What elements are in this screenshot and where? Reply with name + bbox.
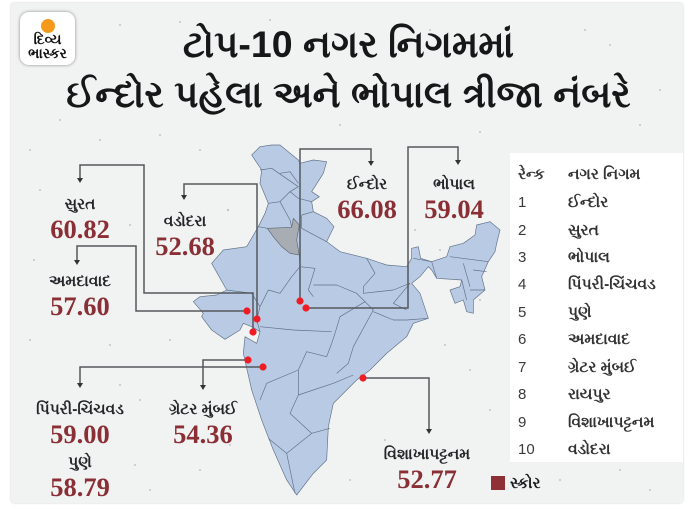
label: Vadodara: 52.68	[155, 231, 215, 261]
row 5	[518, 302, 592, 321]
row 2	[518, 222, 599, 239]
row 10: વડોદરા	[568, 441, 611, 458]
connector: Bhopal	[306, 147, 461, 308]
row 4: 4	[518, 276, 526, 293]
row 2: સુરત	[568, 222, 599, 239]
row 6	[518, 331, 630, 348]
connector: Pimpri-Chinchwad	[77, 367, 263, 388]
logo: Divya Bhaskar: ભાસ્કર	[28, 45, 67, 61]
label: Surat: 60.82	[50, 214, 110, 244]
connector: Visakhapatnam	[363, 378, 432, 434]
label: Greater Mumbai	[169, 400, 238, 449]
label: Pune: 58.79	[50, 472, 110, 502]
row 6: 6	[518, 331, 526, 348]
table header: નગર નિગમ	[568, 166, 640, 183]
legend: score: સ્કોર	[510, 475, 541, 492]
row 8	[518, 386, 611, 403]
Haryana highlight	[267, 218, 299, 255]
label: Surat: સુરત	[65, 196, 95, 213]
label: Pimpri-Chinchwad: પિંપરી-ચિંચવડ	[36, 401, 124, 418]
row 9: 9	[518, 414, 526, 431]
row 3: 3	[518, 249, 526, 266]
logo: Divya Bhaskar	[20, 12, 75, 65]
table header	[518, 164, 640, 183]
label: Vadodara: વડોદરા	[164, 213, 206, 230]
map outline	[193, 145, 500, 495]
row 3	[518, 248, 610, 266]
label: Indore	[337, 174, 397, 224]
panel: ranking table	[510, 153, 683, 462]
row 1: 1	[518, 194, 526, 211]
row 5: 5	[518, 304, 526, 321]
row 4: પિંપરી-ચિંચવડ	[568, 276, 656, 293]
row 2: 2	[518, 222, 526, 239]
row 9: વિશાખાપટ્ટનમ	[568, 414, 654, 431]
label: Ahmedabad: 57.60	[50, 291, 110, 321]
label: Ahmedabad	[49, 273, 111, 321]
label: Bhopal	[424, 174, 484, 224]
label: Bhopal: 59.04	[424, 194, 484, 224]
connector: Greater Mumbai	[200, 360, 248, 390]
label: Greater Mumbai: ગ્રેટર મુંબઈ	[169, 401, 237, 418]
connector: Vadodara	[181, 184, 257, 319]
title line 1: ટોપ-10 નગર નિગમમાં	[183, 23, 514, 65]
label: Pune	[50, 452, 110, 502]
title line 2: ઈન્દોર પહેલા અને ભોપાલ ત્રીજા નંબરે	[66, 73, 631, 115]
row 6: અમદાવાદ	[568, 331, 630, 348]
table header: રેન્ક	[518, 166, 545, 183]
connector: Indore	[300, 149, 374, 301]
label: Pimpri-Chinchwad: 59.00	[50, 419, 110, 449]
row 8: 8	[518, 386, 526, 403]
connector: Ahmedabad	[74, 246, 247, 311]
label: Indore: ઈન્દોર	[347, 176, 387, 193]
row 9	[518, 413, 654, 432]
row 7: ગ્રેટર મુંબઈ	[568, 359, 636, 376]
city markers	[243, 297, 367, 382]
state borders	[227, 168, 488, 493]
label: Visakhapatnam: વિશાખાપટ્ટનમ	[384, 446, 470, 463]
row 10	[518, 440, 611, 458]
row 7	[518, 358, 637, 376]
row 1	[518, 192, 608, 211]
row 8: રાયપુર	[568, 386, 611, 403]
row 10: 10	[518, 441, 535, 458]
label: Pimpri-Chinchwad	[36, 400, 124, 449]
label: Visakhapatnam	[384, 445, 470, 494]
label: Surat	[50, 196, 110, 244]
label: Pune: પુણે	[68, 454, 92, 471]
logo: Divya Bhaskar: દિવ્ય	[34, 31, 61, 47]
label: Indore: 66.08	[337, 194, 397, 224]
label: Vadodara	[155, 212, 215, 261]
row 5: પુણે	[568, 304, 592, 321]
label: Bhopal: ભોપાલ	[433, 176, 475, 193]
row 1: ઈન્દોર	[568, 194, 608, 211]
legend: score	[491, 474, 541, 492]
row 3: ભોપાલ	[568, 249, 610, 266]
row 4	[518, 275, 656, 293]
label: Ahmedabad: અમદાવાદ	[49, 273, 111, 290]
connector: Surat	[77, 165, 253, 332]
row 7: 7	[518, 359, 526, 376]
label: Visakhapatnam: 52.77	[397, 464, 457, 494]
label: Greater Mumbai: 54.36	[173, 419, 233, 449]
